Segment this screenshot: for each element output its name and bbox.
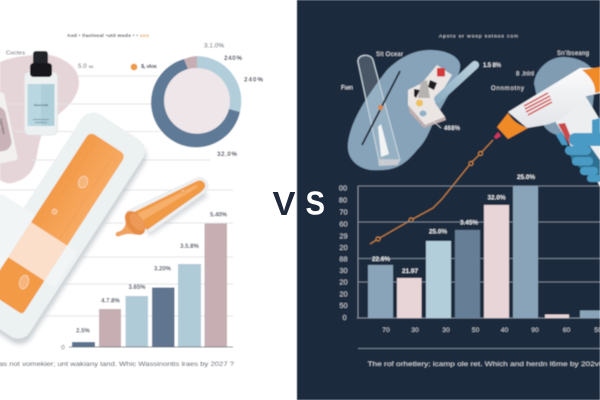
VS heading: S [306, 184, 325, 222]
bar value labels [76, 212, 228, 334]
bar value labels: 4.7.8% [101, 298, 121, 304]
right annotations: 8 .lnlnl [516, 72, 534, 78]
x axis labels: 70 [382, 327, 390, 334]
right bar value labels: 22.6% [372, 256, 390, 263]
pink background blob [0, 54, 79, 183]
VS heading [272, 184, 325, 222]
donut labels: 3.1.0% [204, 42, 224, 50]
icon: handheld scanner with gloved hand [494, 67, 600, 187]
bar chart: right [339, 174, 600, 334]
icon: test tube and pipette [358, 55, 400, 166]
y axis labels: 00 [339, 184, 347, 192]
bar chart: left [61, 212, 233, 352]
legend dot [131, 64, 137, 70]
y axis labels: 20 [339, 278, 348, 286]
right annotations [341, 51, 589, 132]
y axis labels: 88 [339, 254, 348, 264]
x axis labels: 60 [563, 327, 570, 334]
x axis labels: 90 [531, 327, 539, 334]
y axis labels [339, 184, 348, 322]
donut labels: $, vlos [141, 64, 157, 70]
y axis labels: 20 [339, 243, 348, 252]
right title: Apoto or woop sotnos com [439, 34, 518, 40]
right bar value labels: 21.97 [402, 268, 418, 275]
y axis labels: 50 [339, 301, 348, 310]
icon: orange dropper [116, 178, 208, 239]
caption: right: The rof orhetlery; icamp ole ret. Which and herdn l6me by 202v8 [368, 361, 600, 368]
label: Coctes: Coctes [6, 50, 25, 56]
right annotations: Fsen [341, 86, 353, 92]
donut labels [78, 42, 263, 158]
icon: device [408, 65, 475, 128]
donut labels: 240% [224, 55, 242, 62]
right annotations: 468% [444, 126, 461, 132]
right annotations: Slt Ocear [376, 52, 403, 58]
icon: orange patch [0, 92, 154, 350]
x axis labels: 50 [472, 327, 479, 334]
title: Aod • tlaolnoal •utd mods • • ooo [67, 33, 149, 39]
donut chart [151, 56, 241, 147]
panel: left light background [0, 0, 297, 400]
donut labels: 5.0 9ß [78, 64, 94, 70]
y axis labels: 29 [339, 232, 348, 240]
VS heading: V [272, 185, 296, 222]
y axis labels: 20 [339, 290, 348, 298]
right bar value labels: 32.0% [487, 194, 506, 202]
donut labels: 240% [244, 76, 263, 84]
glove [556, 118, 600, 182]
grid lines [0, 76, 233, 316]
bar value labels: 3.20% [154, 266, 172, 272]
icon: serum bottle [24, 51, 58, 135]
icon: blue circle behind gun [534, 57, 596, 135]
x axis labels [382, 327, 600, 334]
icon: small packet [0, 91, 19, 166]
right bar value labels: 25.0% [517, 174, 535, 181]
y axis labels: 70 [339, 208, 348, 216]
caption: left: as not vomekier; unt wakiany land. Whic Wassinontis lraes by 2027 ? [0, 361, 234, 368]
x axis labels: 30 [411, 327, 419, 334]
x axis labels: 30 [442, 327, 450, 334]
right annotations: 1.5 8% [483, 63, 502, 69]
y axis labels: 30 [339, 266, 348, 275]
orange trend line [370, 140, 493, 244]
right annotations: Sn'lbseang [557, 51, 589, 57]
right bar value labels: 25.0% [429, 228, 447, 236]
blue blob [348, 50, 460, 170]
y axis labels: 80 [339, 196, 347, 204]
icon: serum bottle: Dusrxsdd [34, 103, 48, 107]
bar value labels: 5.40% [210, 212, 228, 218]
right bar value labels [372, 174, 535, 275]
y axis labels: 0 [342, 313, 347, 322]
bar chart: left: 0 [61, 344, 65, 352]
y axis labels: 60 [339, 220, 348, 228]
divider line under right chart [358, 348, 600, 350]
x axis labels: 40 [501, 327, 508, 334]
donut labels: 32.0% [217, 151, 237, 158]
bar value labels: 3.65% [128, 285, 146, 291]
right bar value labels: 3.45% [460, 220, 478, 226]
panel: right dark background [297, 0, 600, 400]
right annotations: Onnmotny [491, 86, 524, 92]
bar value labels: 3.5.8% [180, 244, 200, 250]
droplets [18, 175, 89, 290]
bar value labels: 2.5% [76, 328, 90, 334]
